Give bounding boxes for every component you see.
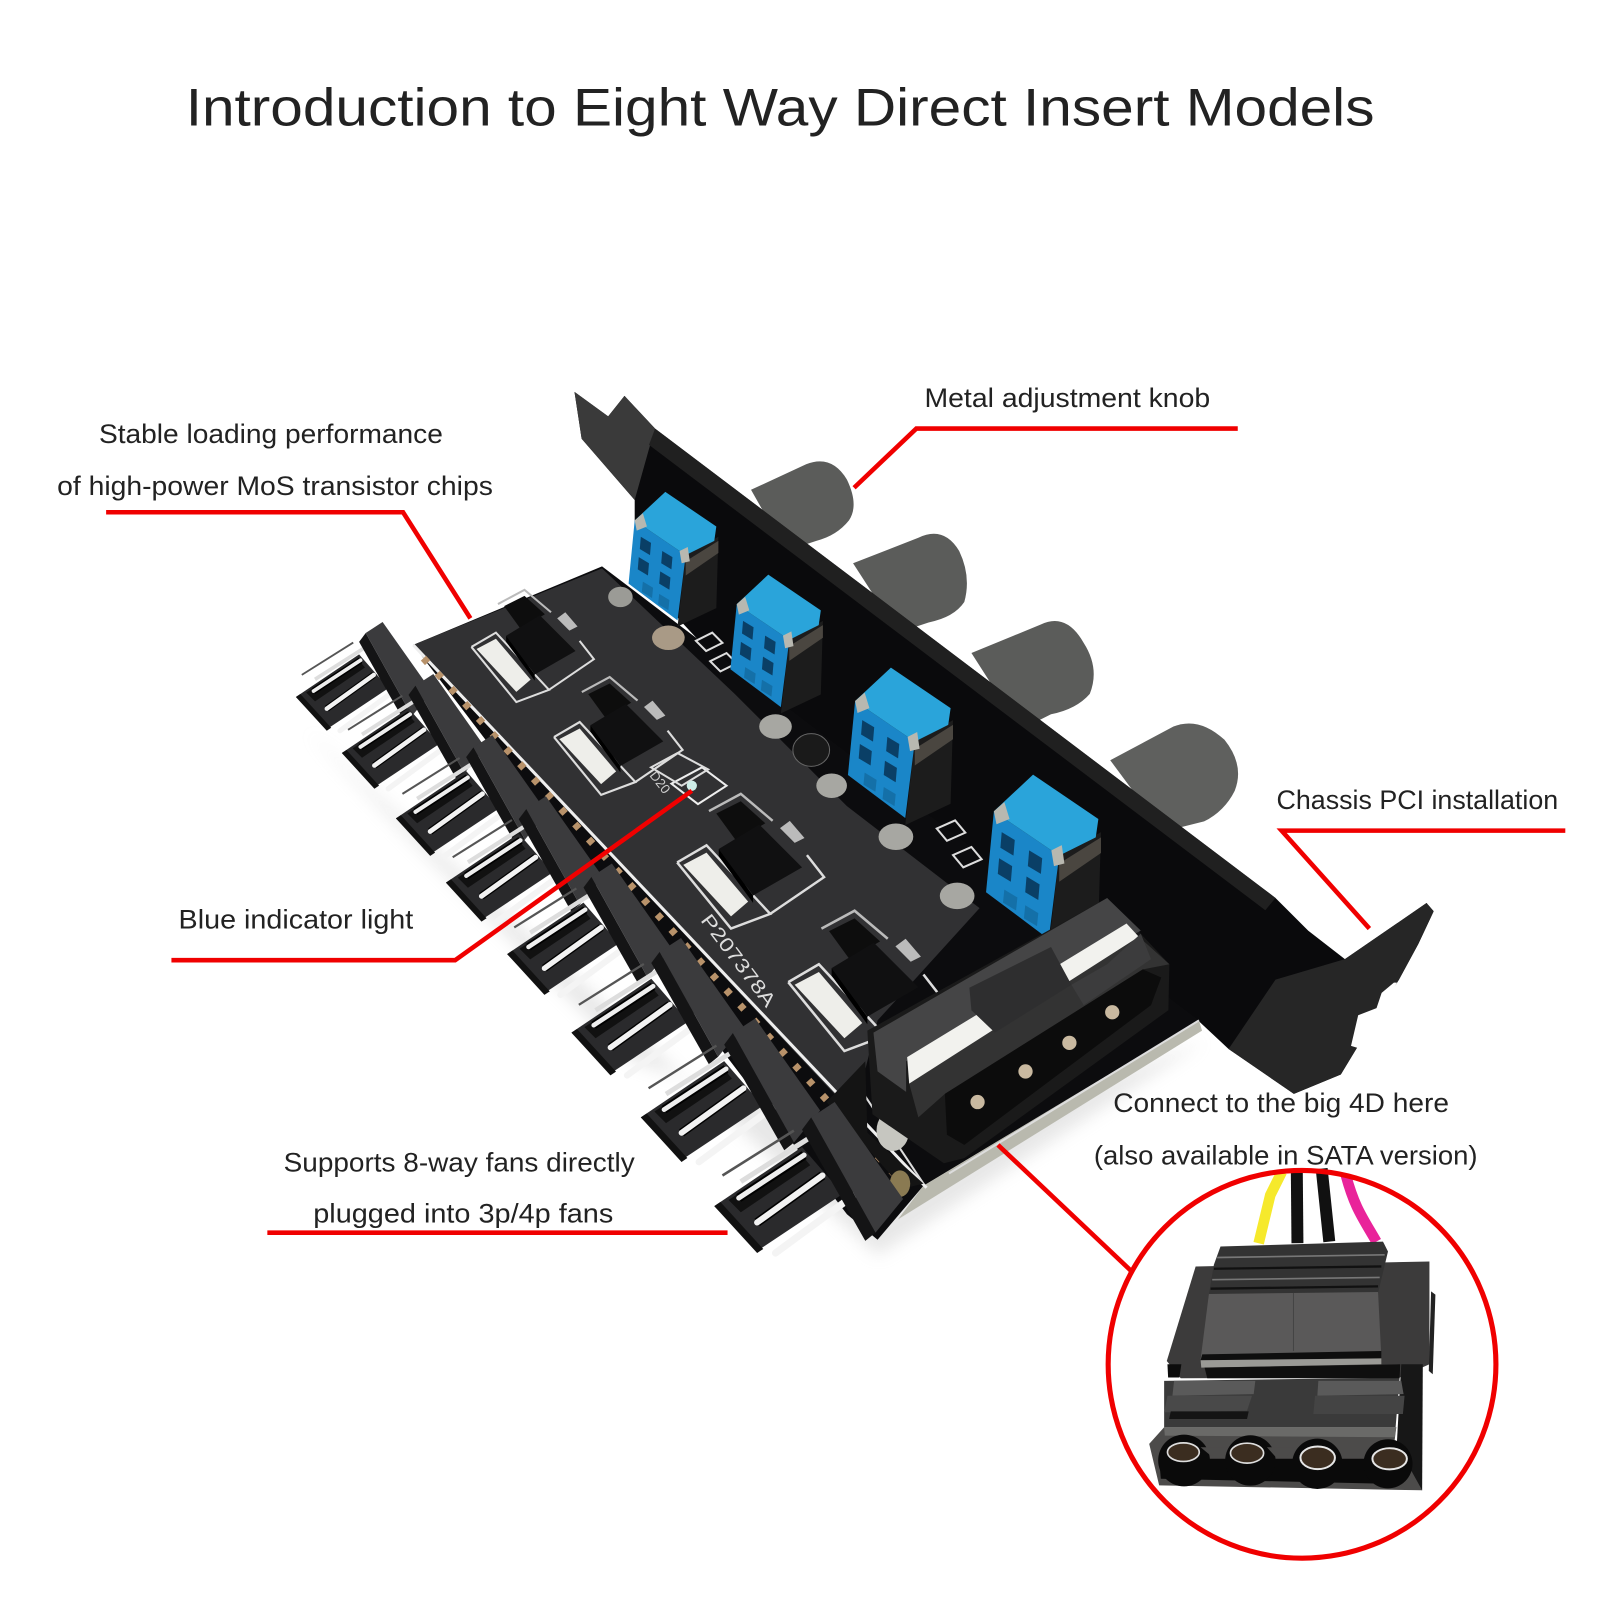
- blue potentiometers: [629, 492, 1101, 947]
- leader: chassis PCI: [1282, 831, 1565, 929]
- pin sockets: [1158, 1435, 1413, 1489]
- potentiometer solder discs and capacitor: [608, 587, 974, 909]
- label: big 4D connector: Connect to the big 4D here: [1113, 1088, 1449, 1118]
- label: metal knob: Metal adjustment knob: [924, 383, 1210, 413]
- product photo: fan controller board: [296, 392, 1434, 1255]
- MOS transistor chips: [471, 590, 941, 1051]
- chip 2: [554, 677, 683, 795]
- leader: connector to ring: [998, 1145, 1131, 1270]
- label: big 4D connector: [1094, 1088, 1478, 1170]
- header 2: [342, 674, 485, 789]
- blue indicator LED: [651, 753, 727, 804]
- knob 4: [1110, 723, 1238, 832]
- header 3: [396, 735, 547, 856]
- label: MOS transistor chips: Stable loading performance: [99, 419, 443, 449]
- leader: fan headers: [267, 1230, 728, 1235]
- eight fan headers: [296, 622, 903, 1253]
- leader: MOS chips: [106, 512, 470, 618]
- circuit board: [413, 566, 1202, 1240]
- title: Introduction to Eight Way Direct Insert Models: [186, 79, 1374, 138]
- silkscreen board code: P207378A: [696, 910, 780, 1012]
- label: 8-way fans: [284, 1147, 635, 1228]
- label: chassis PCI: Chassis PCI installation: [1277, 785, 1558, 815]
- connector body: [1149, 1261, 1435, 1490]
- potentiometer 4: [986, 775, 1101, 947]
- soft shadow under board: [306, 730, 1204, 1255]
- label: indicator light: Blue indicator light: [179, 905, 414, 935]
- header 6: [571, 938, 743, 1075]
- red ring: [1108, 1170, 1496, 1558]
- leader: knob: [854, 429, 1238, 488]
- inset connector photo: [1149, 1169, 1435, 1490]
- label: MOS transistor chips: [57, 419, 493, 501]
- knob 1: [751, 461, 854, 551]
- resistor pads: [696, 633, 982, 867]
- knob 2: [853, 534, 967, 633]
- board power connector: [867, 898, 1169, 1163]
- header 5: [507, 864, 671, 995]
- label: 8-way fans: Supports 8-way fans directly: [284, 1147, 635, 1177]
- chip 1: [471, 590, 594, 702]
- callout circle: Molex connector: [1108, 1169, 1496, 1558]
- header 7: [641, 1018, 820, 1162]
- label: big 4D connector: (also available in SATA version): [1094, 1140, 1478, 1170]
- header 1: [296, 622, 432, 731]
- latch: [1201, 1242, 1400, 1378]
- potentiometer 3: [848, 668, 953, 825]
- chip 4: [788, 911, 941, 1051]
- label: MOS transistor chips: of high-power MoS transistor chips: [57, 471, 493, 501]
- label: 8-way fans: plugged into 3p/4p fans: [313, 1198, 613, 1228]
- potentiometer 1: [629, 492, 718, 627]
- potentiometer 2: [730, 575, 823, 713]
- coloured wires: [1259, 1169, 1376, 1243]
- leader: indicator light: [171, 791, 692, 960]
- chip 3: [677, 794, 824, 929]
- knob 3: [971, 621, 1094, 730]
- header 4: [446, 796, 603, 922]
- header 8: [714, 1102, 903, 1253]
- silkscreen lot code: D20: [647, 768, 673, 797]
- PCI bracket: [574, 392, 1434, 1094]
